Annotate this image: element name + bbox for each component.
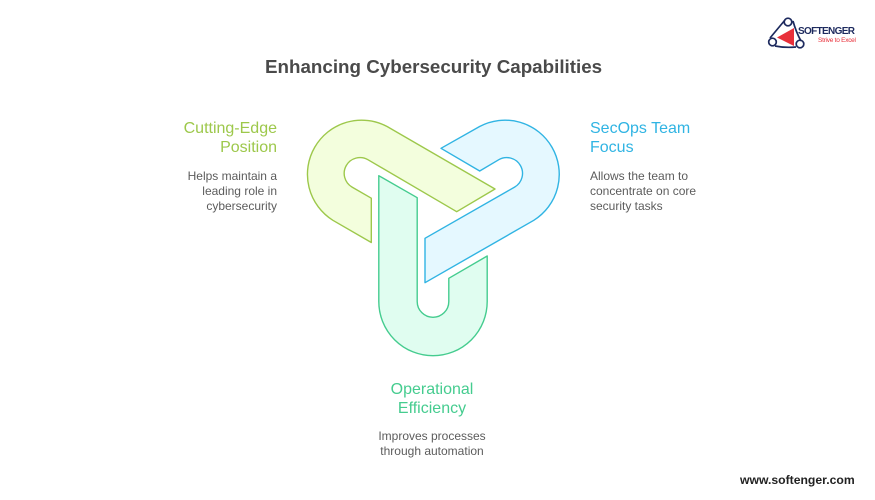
link: secops team focus bbox=[425, 120, 559, 283]
heading: operational efficiency bbox=[391, 381, 473, 417]
description: secops team focus bbox=[590, 169, 696, 213]
label: operational efficiency bbox=[378, 381, 486, 458]
description: cutting-edge position bbox=[188, 169, 278, 213]
heading: cutting-edge position bbox=[184, 120, 277, 156]
description: secops team focus: Allows the team to bbox=[590, 169, 688, 183]
heading: cutting-edge position: Position bbox=[220, 139, 277, 156]
link: cutting-edge position bbox=[307, 120, 495, 242]
description: cutting-edge position: Helps maintain a bbox=[188, 169, 277, 183]
description: cutting-edge position: cybersecurity bbox=[206, 199, 277, 213]
heading: cutting-edge position: Cutting-Edge bbox=[184, 120, 277, 137]
heading: operational efficiency: Operational bbox=[391, 381, 473, 398]
description: cutting-edge position: leading role in bbox=[202, 184, 277, 198]
link: operational efficiency bbox=[379, 176, 487, 356]
heading: operational efficiency: Efficiency bbox=[398, 400, 466, 417]
title: Enhancing Cybersecurity Capabilities bbox=[265, 56, 602, 76]
description: operational efficiency: Improves processes bbox=[378, 429, 486, 443]
description: operational efficiency: through automation bbox=[380, 444, 484, 458]
heading: secops team focus: Focus bbox=[590, 139, 634, 156]
description: secops team focus: security tasks bbox=[590, 199, 663, 213]
label: secops team focus bbox=[590, 120, 696, 213]
description: operational efficiency bbox=[378, 429, 486, 458]
logo wordmark: SOFTENGER bbox=[798, 26, 856, 37]
logo tagline: Strive to Excel bbox=[818, 37, 857, 44]
website url: www.softenger.com bbox=[740, 472, 855, 486]
heading: secops team focus: SecOps Team bbox=[590, 120, 690, 137]
heading: secops team focus bbox=[590, 120, 690, 156]
logo icon: red triangle with loops bbox=[769, 18, 804, 48]
logo bbox=[768, 17, 857, 49]
description: secops team focus: concentrate on core bbox=[590, 184, 696, 198]
label: cutting-edge position bbox=[184, 120, 278, 213]
